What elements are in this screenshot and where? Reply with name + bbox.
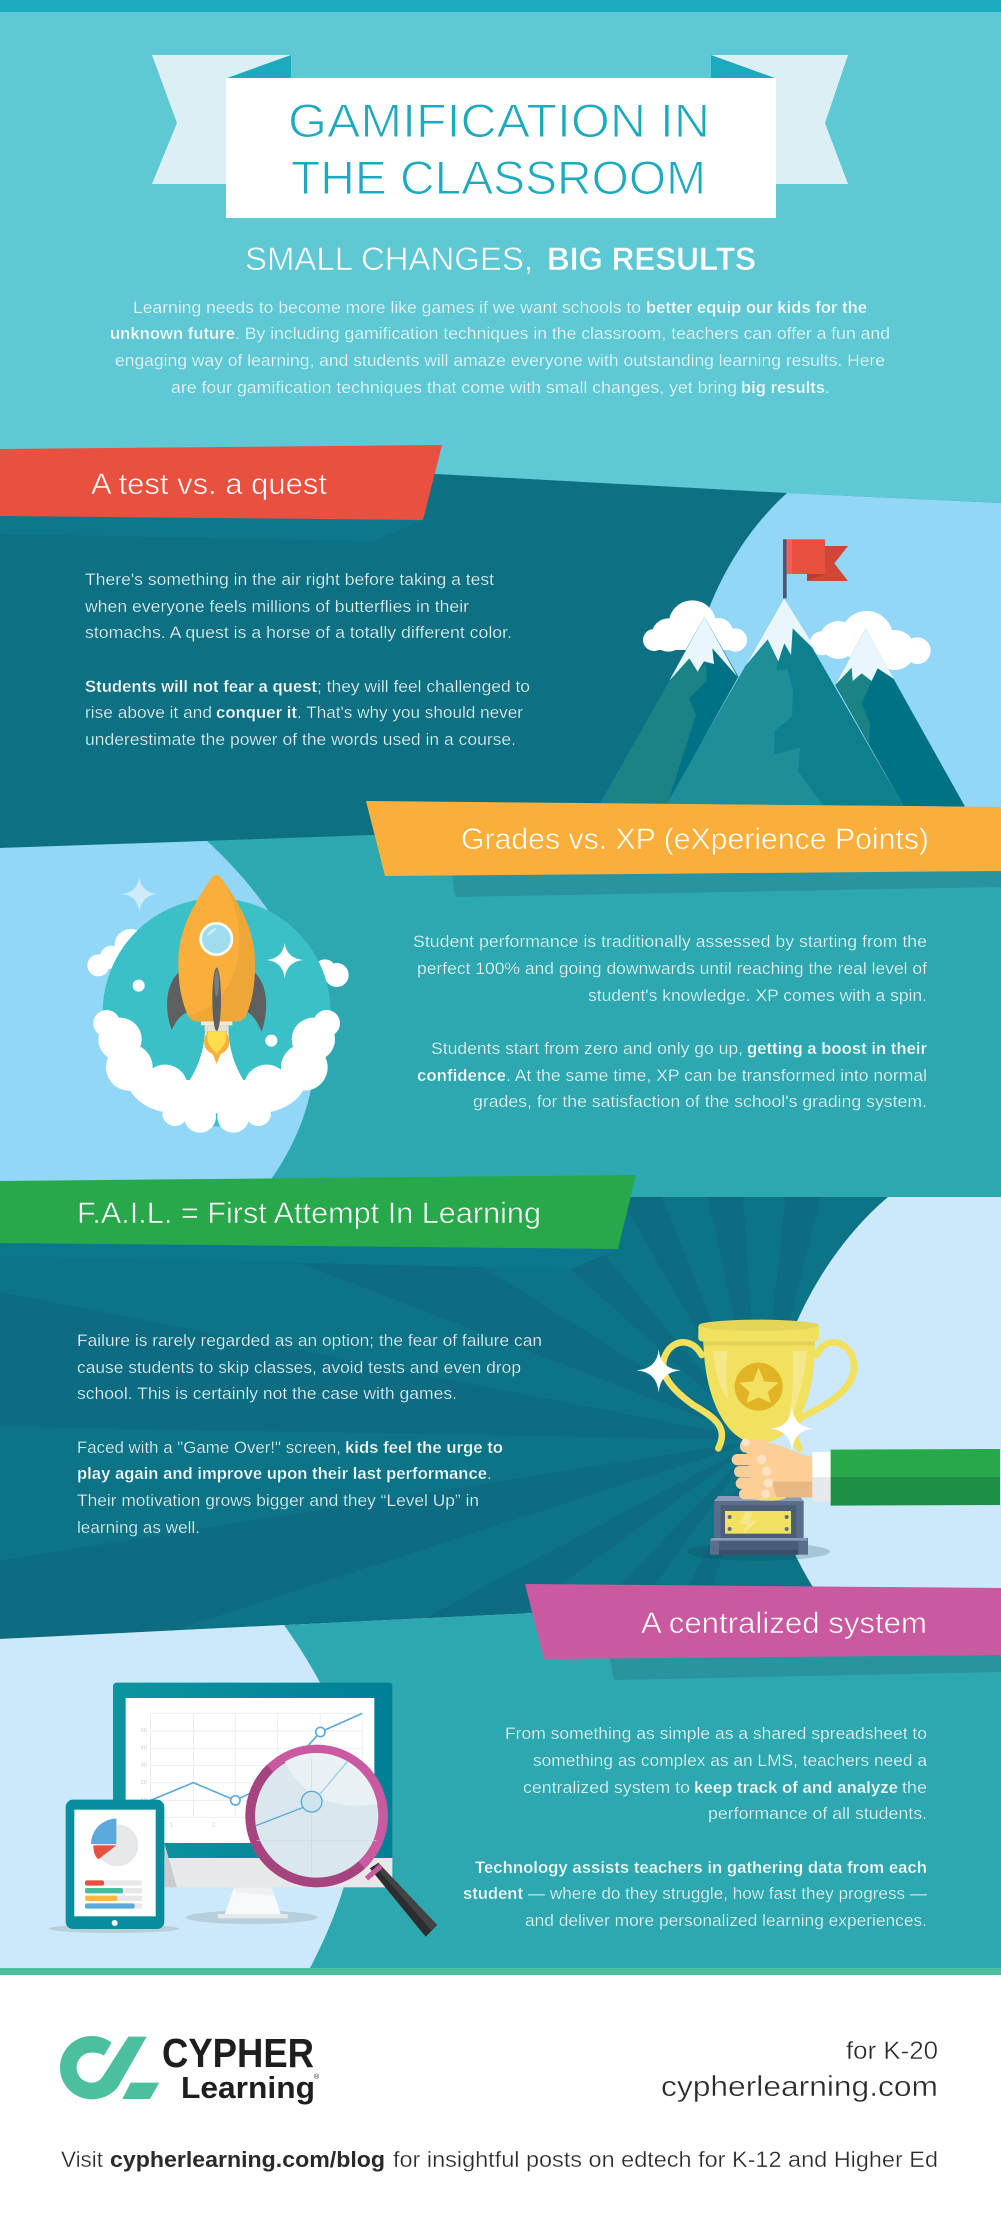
- sleeve: [831, 1449, 1000, 1506]
- text: section 3: Faced with a "Game Over!" screen,: [77, 1439, 341, 1457]
- text: section 1: stomachs. A quest is a horse of a totally different color.: [85, 624, 512, 642]
- intro paragraph: are four gamification techniques that come with small changes, yet bring: [171, 379, 737, 397]
- heading: grades vs. xp: [366, 801, 1001, 897]
- left peak: [600, 617, 738, 804]
- text: section 4: performance of all students.: [708, 1805, 927, 1823]
- text: section 2: getting a boost in their: [747, 1040, 928, 1058]
- icon: mountains with flag: [600, 539, 965, 807]
- text: section 4: and deliver more personalized learning experiences.: [525, 1912, 927, 1930]
- intro paragraph: [110, 299, 890, 397]
- panel: section 2 background: [0, 815, 1001, 1200]
- text: section 1: rise above it and: [85, 704, 212, 722]
- section 1 sky circle: [670, 493, 1001, 810]
- footer logo: [60, 2030, 320, 2105]
- heading: a centralized system: [525, 1584, 1001, 1680]
- centre peak: [667, 598, 903, 806]
- ribbon tails: [152, 55, 848, 184]
- panel: section 4 background: [0, 1590, 1001, 1968]
- text: section 3: learning as well.: [77, 1519, 200, 1537]
- gold foot under fist: [750, 1493, 787, 1501]
- sunburst rays: [0, 1614, 520, 1639]
- text: section 1: conquer it: [216, 704, 298, 722]
- icon: monitor, tablet and magnifier: [49, 1683, 437, 1937]
- line chart: [141, 1713, 362, 1829]
- rocket fins: [167, 972, 266, 1032]
- panel: section 1 background: [0, 470, 1001, 850]
- flag: [783, 539, 848, 598]
- intro paragraph: big results: [741, 379, 825, 397]
- heading: fail: F.A.I.L. = First Attempt In Learning: [77, 1197, 541, 1230]
- line chart: 30: [141, 1763, 147, 1769]
- text: section 3: play again and improve upon their last performance: [77, 1465, 487, 1483]
- panel: section 3 background: [0, 1197, 1001, 1639]
- bottom accent bar: [0, 1968, 1001, 1975]
- text: section 3: Failure is rarely regarded as an option; the fear of failure can: [77, 1332, 542, 1350]
- title: THE CLASSROOM: [291, 151, 706, 204]
- text: section 3: school. This is certainly not the case with games.: [77, 1385, 457, 1403]
- rocket nozzle: [201, 1021, 232, 1025]
- text: section 1: Students will not fear a quest: [85, 678, 318, 696]
- text: section 3: cause students to skip classes, avoid tests and even drop: [77, 1359, 521, 1377]
- intro paragraph: Learning needs to become more like games if we want schools to: [133, 299, 641, 317]
- text: section 3: [77, 1332, 542, 1537]
- text: section 2: [413, 933, 928, 1111]
- text: section 1: when everyone feels millions of butterflies in their: [84, 598, 470, 616]
- text: section 1: [84, 571, 530, 749]
- line chart: 1: [170, 1823, 173, 1829]
- section 4 light circle: [0, 1625, 356, 1968]
- trophy sparkles: [637, 1349, 814, 1451]
- footer blog line: cypherlearning.com/blog: [110, 2147, 385, 2172]
- clouds behind peaks: [643, 600, 931, 670]
- text: section 2: grades, for the satisfaction of the school's grading system.: [473, 1093, 927, 1111]
- footer url: for K-20: [846, 2037, 938, 2065]
- text: section 4: centralized system to: [523, 1779, 690, 1797]
- text: section 1: ; they will feel challenged to: [317, 678, 530, 696]
- text: section 4: student: [463, 1885, 523, 1903]
- shirt cuff: [812, 1452, 831, 1502]
- text: section 2: confidence: [417, 1067, 506, 1085]
- heading: a test vs. a quest: A test vs. a quest: [91, 468, 328, 501]
- footer blog line: Visit: [61, 2147, 103, 2172]
- footer url: cypherlearning.com: [661, 2071, 938, 2103]
- text: section 2: perfect 100% and going downwards until reaching the real level of: [417, 960, 927, 978]
- text: section 4: [463, 1725, 928, 1930]
- tablet: [49, 1800, 179, 1933]
- logo wordmark: Learning: [181, 2070, 315, 2105]
- heading: a centralized system: A centralized system: [641, 1607, 927, 1640]
- logo wordmark: ®: [314, 2073, 320, 2081]
- banner white box: [226, 78, 776, 218]
- section 2 sky circle: [0, 841, 315, 1185]
- clouds behind rocket: [87, 929, 349, 987]
- line chart: 50: [141, 1728, 147, 1734]
- text: section 4: From something as simple as a shared spreadsheet to: [505, 1725, 927, 1743]
- text: section 1: There's something in the air right before taking a test: [85, 571, 494, 589]
- text: section 4: something as complex as an LMS, teachers need a: [533, 1752, 928, 1770]
- icon: rocket: [87, 875, 349, 1133]
- logo wordmark: CYPHER: [162, 2030, 314, 2076]
- hand: [732, 1438, 812, 1499]
- subtitle: [245, 241, 756, 277]
- header banner: [152, 55, 848, 218]
- footer blog line: [61, 2147, 938, 2172]
- trophy shadow: [687, 1543, 830, 1561]
- icon: trophy held by hand: [637, 1320, 1000, 1561]
- logo wordmark: [162, 2030, 320, 2105]
- magnifier: [245, 1745, 437, 1937]
- sparkles and dots: [121, 877, 303, 1047]
- text: section 1: . That's why you should never: [297, 704, 524, 722]
- text: section 3: .: [487, 1465, 492, 1483]
- text: section 3: Their motivation grows bigger and they “Level Up” in: [77, 1492, 479, 1510]
- intro paragraph: unknown future: [110, 325, 235, 343]
- text: section 4: keep track of and analyze: [694, 1779, 898, 1797]
- intro paragraph: .: [825, 379, 830, 397]
- subtitle: SMALL CHANGES,: [245, 241, 533, 277]
- trophy handles: [663, 1342, 854, 1448]
- monitor: [113, 1683, 392, 1924]
- text: section 2: Student performance is traditionally assessed by starting from the: [413, 933, 927, 951]
- heading: a test vs. a quest: [0, 445, 442, 541]
- line chart: 20: [141, 1780, 147, 1786]
- text: section 2: . At the same time, XP can be transformed into normal: [506, 1067, 927, 1085]
- trophy base: [710, 1496, 808, 1555]
- line chart: 2: [212, 1823, 215, 1829]
- footer url: [661, 2037, 938, 2103]
- smoke: [93, 1010, 340, 1133]
- text: section 4: — where do they struggle, how fast they progress —: [528, 1885, 928, 1903]
- line chart: 40: [141, 1745, 147, 1751]
- title: [288, 94, 710, 204]
- footer blog line: for insightful posts on edtech for K-12 and Higher Ed: [393, 2147, 938, 2172]
- heading: grades vs. xp: Grades vs. XP (eXperience Points): [461, 823, 929, 856]
- teal disc: [103, 898, 331, 1126]
- subtitle: BIG RESULTS: [547, 241, 756, 277]
- section 3 light circle: [768, 1197, 1001, 1595]
- line chart: 10: [141, 1797, 147, 1803]
- trophy cup: [698, 1320, 819, 1443]
- heading: fail: [0, 1175, 636, 1269]
- flame: [204, 1032, 229, 1064]
- text: section 4: Technology assists teachers in gathering data from each: [475, 1859, 927, 1877]
- intro paragraph: better equip our kids for the: [646, 299, 867, 317]
- text: section 4: the: [902, 1779, 927, 1797]
- text: section 2: Students start from zero and only go up,: [431, 1040, 743, 1058]
- intro paragraph: . By including gamification techniques in the classroom, teachers can offer a fun and: [235, 325, 890, 343]
- title: GAMIFICATION IN: [288, 94, 710, 147]
- intro paragraph: engaging way of learning, and students will amaze everyone with outstanding learning results. Here: [115, 352, 885, 370]
- text: section 1: underestimate the power of the words used in a course.: [85, 731, 516, 749]
- rocket body: [178, 875, 255, 1031]
- text: section 2: student's knowledge. XP comes with a spin.: [588, 987, 927, 1005]
- right peak: [835, 628, 965, 807]
- text: section 3: kids feel the urge to: [345, 1439, 503, 1457]
- logo mark: [60, 2036, 159, 2099]
